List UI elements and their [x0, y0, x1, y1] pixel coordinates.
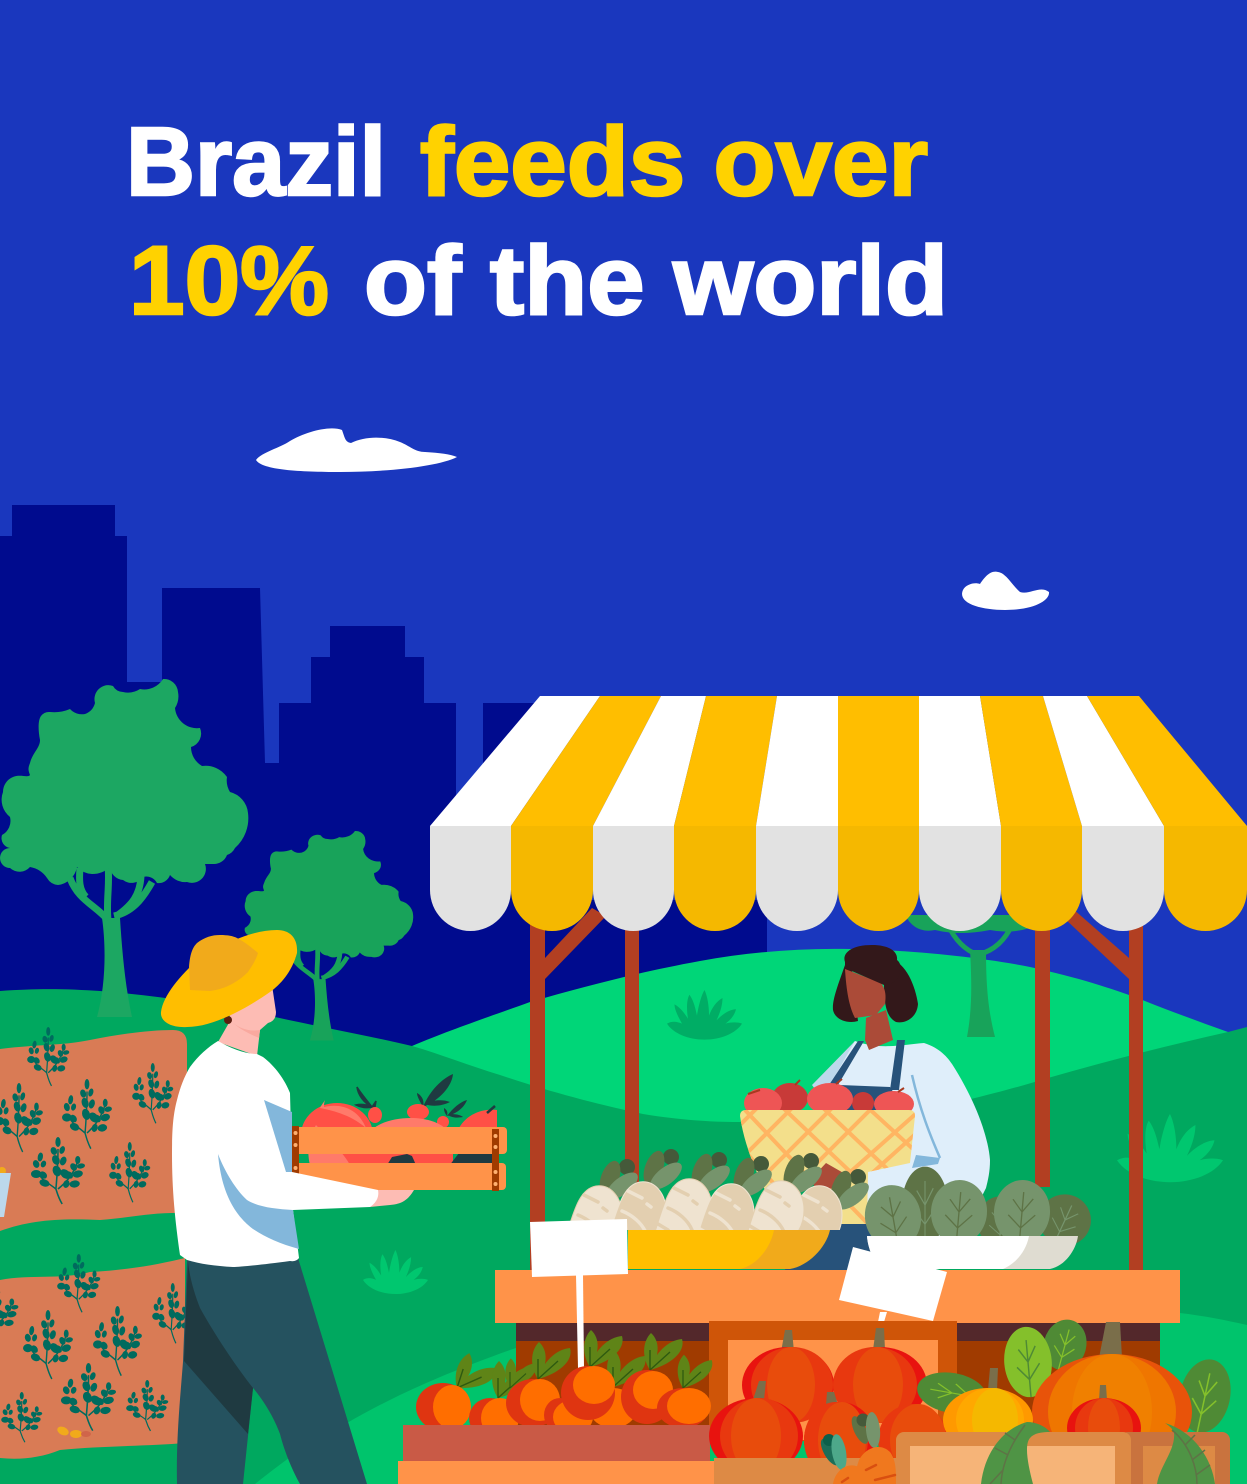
- trousers: [177, 1258, 367, 1484]
- apples: [744, 1079, 914, 1118]
- front crates: [896, 1432, 1230, 1484]
- farmer head and neck: [218, 985, 276, 1056]
- hill: bright green front: [255, 1294, 1247, 1484]
- awning scallops: [430, 826, 1247, 931]
- title line 1 highlight: feeds over: [420, 107, 928, 216]
- crate behind pumpkins: [709, 1321, 957, 1441]
- market stall: [398, 696, 1247, 1484]
- spinach leaves: [860, 1167, 1099, 1254]
- city skyline: [0, 505, 767, 1060]
- carrots in crate: [416, 1330, 712, 1438]
- stall table: [495, 1270, 1180, 1441]
- title line 2: of the world: [364, 226, 948, 335]
- yellow bowl: [628, 1230, 830, 1269]
- field plot: lower: [0, 1254, 194, 1459]
- title line 2 highlight: 10%: [129, 226, 329, 335]
- farmer hand: [370, 1190, 414, 1207]
- awning top stripes: [430, 696, 1247, 826]
- tree: medium: [244, 831, 413, 1041]
- stall posts and braces: [530, 905, 1143, 1270]
- pumpkin leaves: [914, 1315, 1237, 1438]
- price tag: left: [530, 1219, 628, 1368]
- straw hat: [161, 930, 297, 1027]
- red pumpkins: [709, 1328, 948, 1478]
- vendor hand: [812, 1163, 847, 1190]
- cloud: large: [256, 428, 457, 472]
- bush: right: [1117, 1114, 1223, 1182]
- turnips: [570, 1149, 869, 1230]
- white bowl: [867, 1236, 1078, 1269]
- price tag: centre: [839, 1247, 947, 1322]
- bucket at field edge: [0, 1167, 11, 1217]
- hill: dark green foreground: [0, 989, 1247, 1484]
- crate slats: [286, 1127, 507, 1154]
- crate produce: [301, 1074, 497, 1168]
- title: [126, 107, 948, 335]
- vendor woman: [785, 945, 990, 1270]
- wooden crate with produce: [286, 1074, 507, 1191]
- hill: light green: [412, 949, 1247, 1200]
- bush: on light hill: [667, 990, 742, 1040]
- title line 1: Brazil: [126, 107, 386, 216]
- awning: [430, 696, 1247, 931]
- tree: behind stall: [905, 915, 1030, 1037]
- field plot: upper: [0, 1027, 187, 1231]
- bush: centre: [363, 1250, 428, 1294]
- white shirt: [172, 1041, 378, 1267]
- orange pumpkins: [943, 1322, 1192, 1470]
- crate posts: [292, 1126, 499, 1191]
- woven basket: [740, 1110, 915, 1224]
- cloud: small: [962, 572, 1049, 610]
- farmer carrying crate: [161, 930, 507, 1484]
- crate under carrots: [398, 1425, 714, 1484]
- tree: large: [0, 679, 248, 1017]
- crate base under pumpkins: [714, 1458, 899, 1484]
- small front carrots: [817, 1411, 896, 1484]
- large front leaves: [981, 1422, 1215, 1484]
